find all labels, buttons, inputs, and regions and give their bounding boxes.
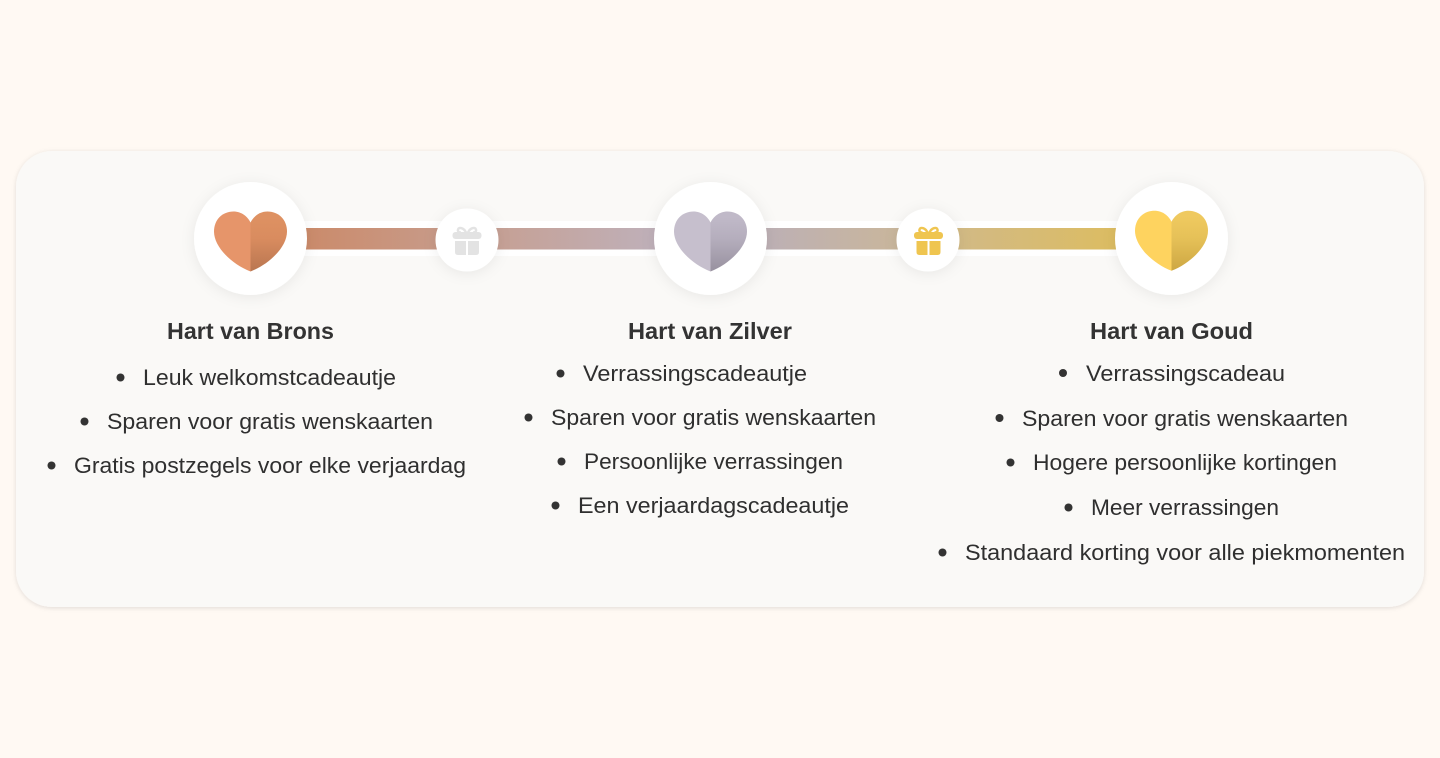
icon: grey gift [436, 208, 498, 272]
list: gold benefits [938, 361, 1405, 565]
list: silver benefits: Sparen voor gratis wenskaarten [551, 405, 876, 430]
list: gold benefits: Standaard korting voor alle piekmomenten [965, 540, 1405, 565]
column: Hart van Goud [938, 318, 1405, 565]
list: silver benefits: Verrassingscadeautje [583, 361, 807, 386]
list: silver benefits [524, 361, 876, 518]
icon: gold gift [896, 208, 960, 272]
list: gold benefits: Sparen voor gratis wenskaarten [1022, 406, 1348, 431]
heading: Hart van Zilver: Hart van Zilver [628, 318, 792, 344]
panel: loyalty levels card [16, 151, 1424, 607]
list: silver benefits: Persoonlijke verrassingen [584, 449, 843, 474]
icon: bronze heart [194, 182, 307, 295]
list: gold benefits: Verrassingscadeau [1086, 361, 1285, 386]
column: Hart van Brons [48, 318, 466, 478]
icon: silver heart [654, 182, 767, 295]
heading: Hart van Brons: Hart van Brons [167, 318, 334, 344]
list: bronze benefits [48, 365, 466, 478]
list: gold benefits: Meer verrassingen [1091, 495, 1279, 520]
list: silver benefits: Een verjaardagscadeautje [578, 493, 849, 518]
list: bronze benefits: Sparen voor gratis wenskaarten [107, 409, 433, 434]
list: gold benefits: Hogere persoonlijke kortingen [1033, 450, 1337, 475]
heading: Hart van Goud: Hart van Goud [1090, 318, 1253, 344]
list: bronze benefits: Gratis postzegels voor elke verjaardag [74, 453, 466, 478]
progress track [290, 221, 1130, 256]
column: Hart van Zilver [524, 318, 876, 518]
icon: gold heart [1115, 182, 1228, 295]
list: bronze benefits: Leuk welkomstcadeautje [143, 365, 396, 390]
